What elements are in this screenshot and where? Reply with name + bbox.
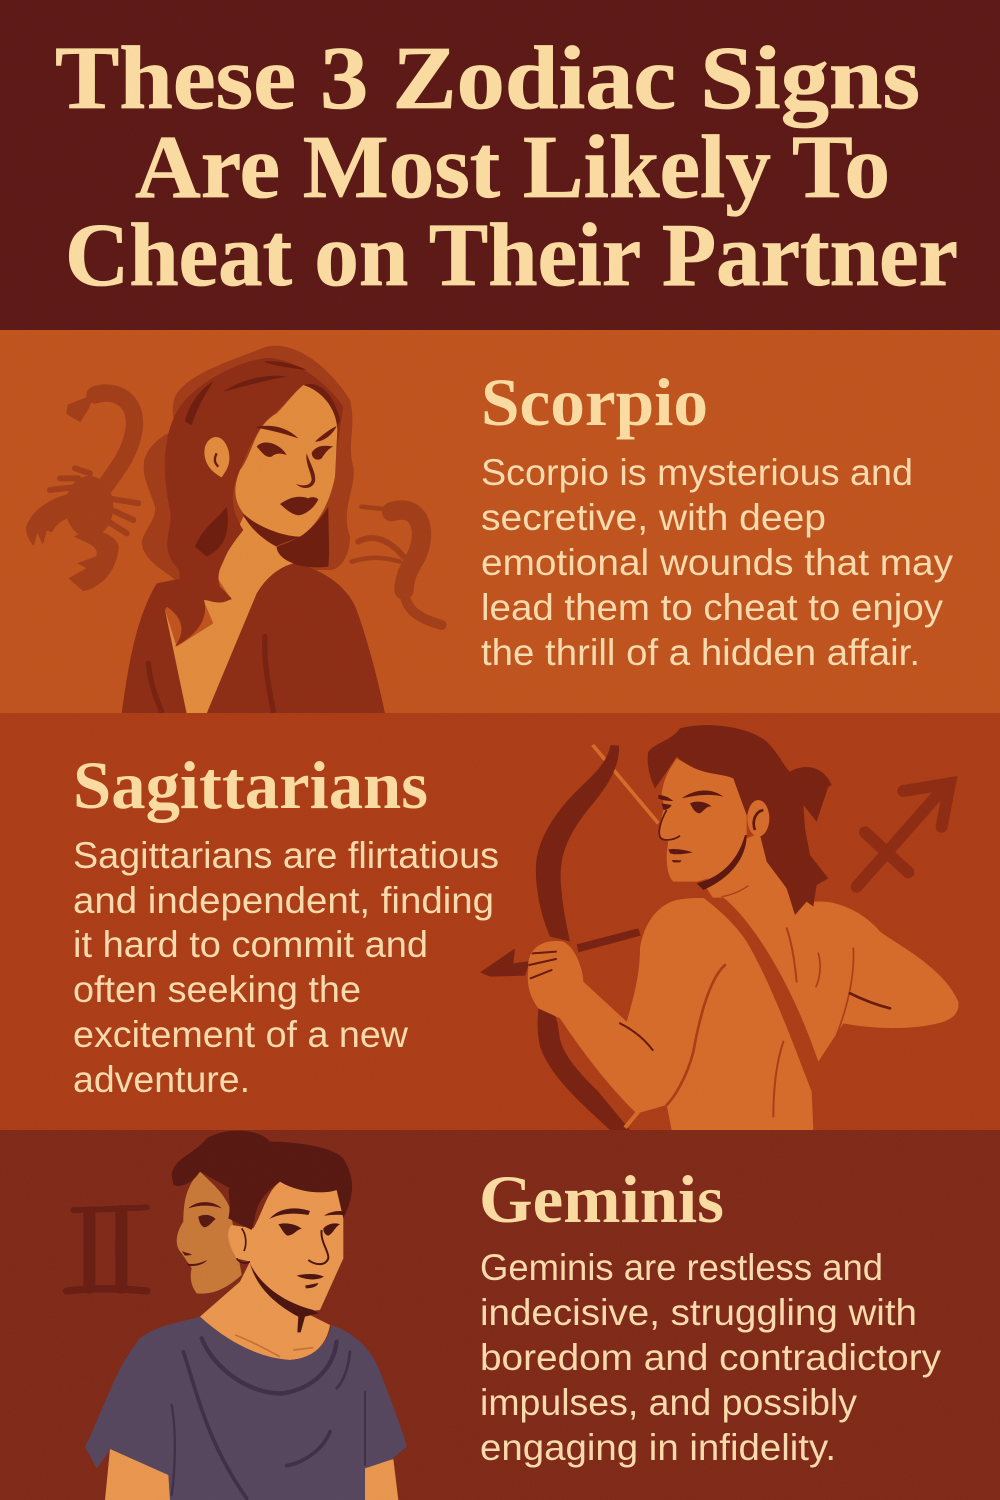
text: Sagittarians description: it hard to commit and: [73, 924, 428, 965]
nose line: [659, 810, 680, 840]
title: Are Most Likely To: [135, 118, 890, 217]
text: Sagittarians description: Sagittarians are flirtatious: [73, 835, 499, 876]
panel: title header: [0, 0, 1000, 330]
strap: [703, 898, 824, 1130]
nose line: [308, 1230, 328, 1264]
text: Scorpio description: Scorpio is mysterious and: [481, 452, 913, 493]
icon: scorpion: [27, 393, 138, 591]
facial features: [250, 1208, 345, 1332]
panel: Sagittarians: [0, 713, 1000, 1130]
title: Cheat on Their Partner: [65, 206, 958, 305]
text: Scorpio description: [481, 452, 954, 673]
text: Geminis description: indecisive, struggling with: [480, 1292, 917, 1333]
heading: Sagittarians: Sagittarians: [73, 747, 428, 823]
arrow: [480, 928, 641, 977]
text: Sagittarians description: adventure.: [73, 1059, 250, 1100]
heading: Geminis: Geminis: [479, 1161, 724, 1237]
text: Scorpio description: emotional wounds that may: [481, 542, 954, 583]
illustration: Gemini twins: [67, 1131, 407, 1500]
hair: [648, 725, 832, 915]
icon: Gemini symbol: [67, 1207, 147, 1291]
icon: scorpion tail and claw: [352, 507, 442, 625]
text: Geminis description: [480, 1247, 942, 1468]
back twin face: [177, 1172, 242, 1294]
body: [627, 832, 959, 1130]
illustration: archer: [480, 725, 959, 1130]
title: [55, 29, 958, 305]
hair shadow: [185, 361, 340, 567]
shirt folds: [172, 1338, 365, 1498]
face: [658, 758, 747, 882]
text: Scorpio description: the thrill of a hidden affair.: [481, 632, 920, 673]
text: Scorpio description: secretive, with deep: [481, 497, 826, 538]
bow: [536, 745, 630, 1130]
dress: [122, 563, 385, 713]
text: Geminis description: Geminis are restless and: [480, 1247, 883, 1288]
text: Scorpio description: lead them to cheat to enjoy: [481, 587, 944, 628]
text: Geminis description: engaging in infidelity.: [480, 1427, 836, 1468]
ear detail: [754, 810, 763, 830]
text: Geminis description: impulses, and possibly: [480, 1382, 857, 1423]
muscle lines: [667, 928, 854, 1117]
collarbone: [235, 1335, 313, 1357]
front twin skin: [200, 1182, 343, 1360]
face: [235, 385, 337, 537]
text: Geminis description: boredom and contradictory: [480, 1337, 942, 1378]
jaw shadow: [243, 513, 300, 547]
facial features: [658, 790, 747, 890]
text: Sagittarians description: and independent, finding: [73, 880, 494, 921]
ear: [747, 800, 769, 837]
text: Sagittarians description: [73, 835, 499, 1100]
shirt: [85, 1317, 407, 1500]
panel: Scorpio: [0, 330, 1000, 713]
icon: Sagittarius symbol: [857, 783, 950, 887]
arms: [105, 1449, 398, 1500]
dress folds: [148, 637, 273, 712]
hair: [172, 1131, 352, 1230]
dark creases and fingers: [529, 952, 890, 1050]
neck crease: [722, 886, 748, 897]
back twin features: [182, 1202, 222, 1266]
illustration: Scorpio woman with scorpions: [27, 346, 442, 713]
skin: neck and chest: [165, 517, 293, 713]
facial features: [255, 426, 337, 515]
ear detail: [215, 453, 218, 467]
text: Sagittarians description: often seeking the: [73, 969, 361, 1010]
arm and hand: [528, 941, 667, 1113]
arrow behind head: [593, 745, 658, 823]
bow string: [625, 1112, 638, 1128]
title: These 3 Zodiac Signs: [55, 29, 920, 128]
hair front: [165, 358, 343, 647]
panel: Geminis: [0, 1130, 1000, 1500]
text: Sagittarians description: excitement of a new: [73, 1014, 408, 1055]
hair back: [142, 346, 354, 583]
ear: [204, 437, 229, 477]
ear detail: [237, 1228, 250, 1263]
heading: Scorpio: Scorpio: [481, 364, 708, 440]
